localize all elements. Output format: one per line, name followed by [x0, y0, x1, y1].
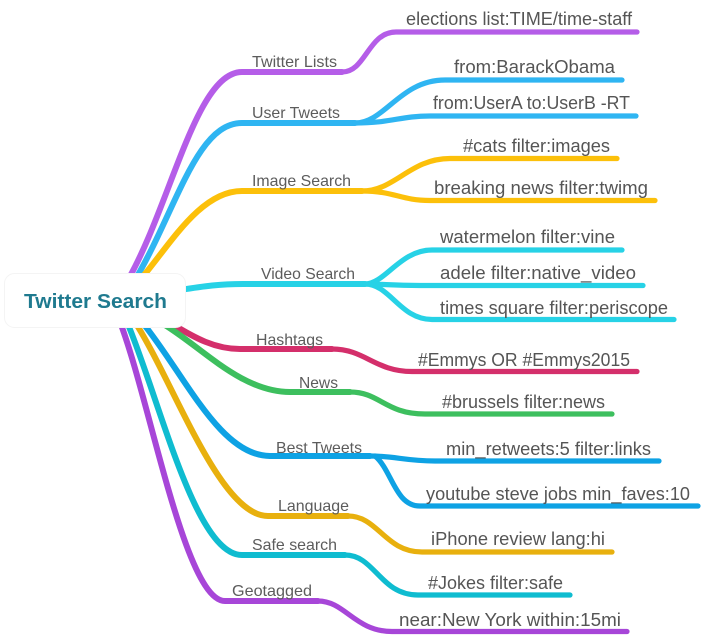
branch: User Tweets: [132, 57, 636, 285]
branch: Geotagged: [120, 322, 627, 632]
branch: Video Search: [180, 227, 674, 320]
branch: Safe search: #Jokes filter:safe: [428, 573, 563, 593]
branch: Twitter Lists: elections list:TIME/time-staff: [406, 9, 633, 29]
branch: User Tweets: from:UserA to:UserB -RT: [433, 93, 630, 113]
branch: Language: Language: [278, 498, 349, 515]
branch: Language: [135, 322, 612, 552]
branch: Language: iPhone review lang:hi: [431, 529, 605, 549]
branch: Hashtags: Hashtags: [256, 332, 323, 349]
branch: Image Search: Image Search: [252, 173, 351, 190]
branch: Twitter Lists: Twitter Lists: [252, 54, 337, 71]
branch: News: #brussels filter:news: [442, 392, 605, 412]
branch: News: [160, 322, 612, 414]
branch: News: News: [299, 375, 338, 392]
branch: Geotagged: near:New York within:15mi: [399, 610, 621, 630]
branch: Twitter Lists: [125, 9, 637, 285]
branch: User Tweets: User Tweets: [252, 105, 340, 122]
branch: Geotagged: Geotagged: [232, 583, 312, 600]
branch: Video Search: Video Search: [261, 266, 355, 283]
central node: Twitter Search: [4, 274, 186, 328]
branch: Safe search: Safe search: [252, 537, 337, 554]
branch: Hashtags: [172, 324, 637, 372]
branch: Image Search: breaking news filter:twimg: [434, 178, 648, 198]
branch: Image Search: #cats filter:images: [463, 136, 610, 156]
branch: Video Search: watermelon filter:vine: [439, 227, 615, 247]
branch: Image Search: [140, 136, 655, 280]
branch: Best Tweets: min_retweets:5 filter:links: [446, 439, 651, 460]
branch: Best Tweets: [142, 322, 698, 506]
branch: Hashtags: #Emmys OR #Emmys2015: [418, 350, 630, 370]
branch: Video Search: adele filter:native_video: [440, 263, 636, 284]
branch: Best Tweets: youtube steve jobs min_faves:10: [426, 484, 690, 505]
branch: Video Search: times square filter:periscope: [440, 298, 668, 318]
branch: User Tweets: from:BarackObama: [454, 57, 616, 77]
central node: Twitter Search: Twitter Search: [24, 291, 167, 313]
branch: Safe search: [127, 322, 570, 595]
branch: Best Tweets: Best Tweets: [276, 440, 362, 457]
